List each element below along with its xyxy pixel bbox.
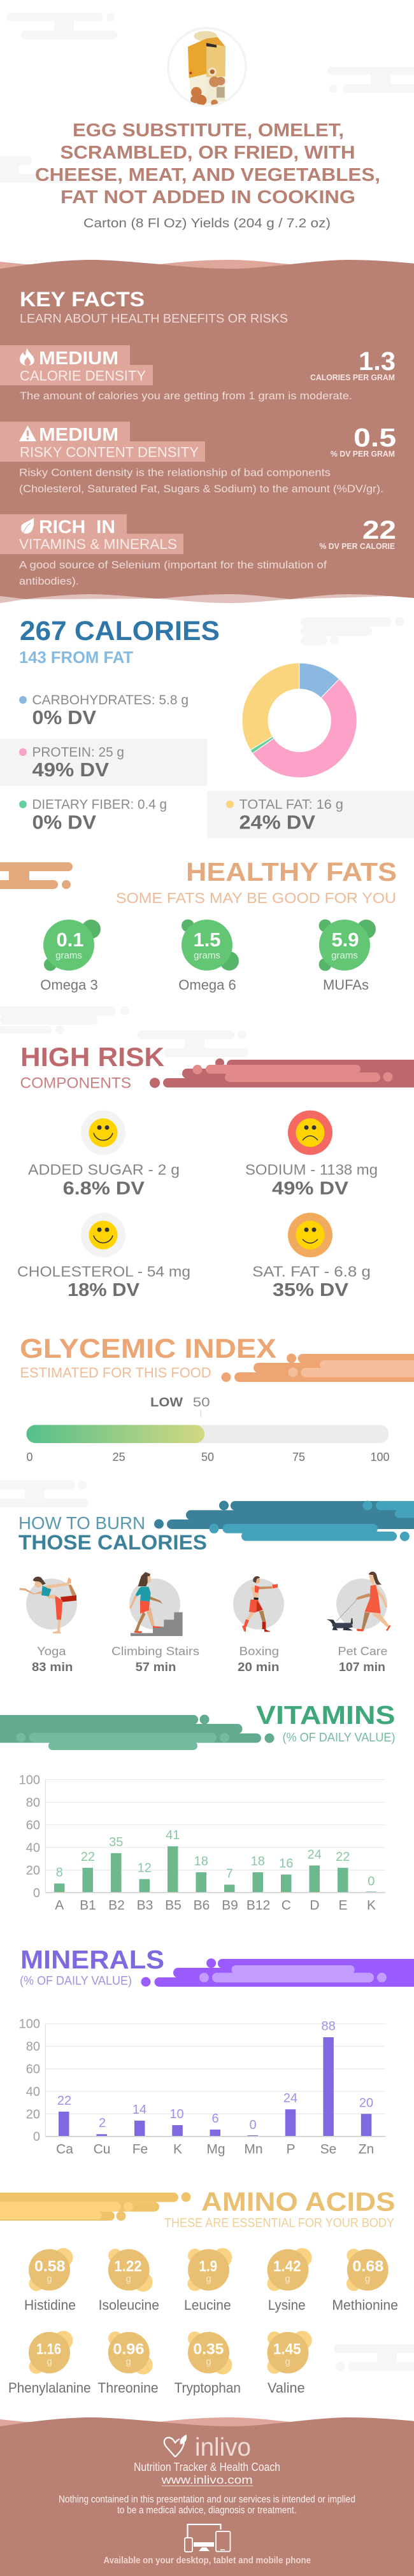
bar chart: minerals: 0 [249, 2118, 257, 2132]
amino: leucine: 1.9 [199, 2258, 217, 2275]
disclaimer: to be a medical advice, diagnosis or treatment. [117, 2505, 297, 2516]
stat: omega 6: grams [194, 950, 220, 961]
bar chart: vitamins: 41 [166, 1828, 180, 1842]
amino: methionine [332, 2249, 398, 2313]
amino: phenylalanine: g [46, 2356, 52, 2367]
amino: isoleucine: g [125, 2274, 131, 2284]
amino: tryptophan: Tryptophan [175, 2380, 241, 2396]
activity durations: 107 min [339, 1661, 385, 1674]
activity durations [32, 1661, 385, 1674]
amino: isoleucine [99, 2249, 159, 2313]
risk: sodium: 49% DV [272, 1178, 349, 1199]
bar chart: minerals: Ca [56, 2142, 73, 2157]
stat: omega 3: 0.1 [56, 929, 84, 951]
rating: RICH IN [39, 517, 115, 537]
amino: histidine: Histidine [24, 2297, 76, 2313]
activity durations: 20 min [238, 1661, 279, 1674]
amino: lysine [268, 2248, 312, 2313]
risk: saturated fat: SAT. FAT - 6.8 g [252, 1263, 371, 1279]
disclaimer: Nothing contained in this presentation and our services is intended or implied [59, 2494, 355, 2505]
decorative banner [0, 1714, 274, 1750]
amino: threonine: g [125, 2356, 131, 2367]
bar chart: minerals: 0 [33, 2130, 40, 2144]
amino: leucine [184, 2248, 232, 2313]
serving size: Carton (8 Fl Oz) Yields (204 g / 7.2 oz) [83, 217, 331, 231]
bar chart: vitamins: 7 [226, 1867, 233, 1881]
amino: threonine [97, 2331, 159, 2396]
icon: flame [20, 348, 34, 366]
logo: inlivo: inlivo [195, 2433, 251, 2461]
bar chart: vitamins: C [282, 1898, 291, 1913]
stat: omega 3: grams [55, 950, 82, 961]
macro: dietary fiber: DIETARY FIBER: 0.4 g [32, 797, 167, 812]
panel: how to burn those calories [18, 1500, 414, 1674]
decorative cloud: top right [327, 67, 414, 93]
logo: inlivo [164, 2433, 251, 2461]
bar chart: minerals: Mn [244, 2142, 263, 2157]
panel: amino acids [0, 2187, 398, 2396]
bar chart: minerals: Mg [206, 2142, 225, 2157]
bar chart: vitamins: B3 [137, 1898, 153, 1913]
title: SCRAMBLED, OR FRIED, WITH [60, 143, 355, 163]
description: antibodies). [19, 575, 79, 587]
heading: VITAMINS [256, 1700, 395, 1730]
panel: glycemic index [20, 1334, 414, 1463]
decorative banner [150, 1058, 414, 1088]
gauge scale: 25 [113, 1451, 125, 1463]
macro: total fat: TOTAL FAT: 16 g [239, 797, 343, 812]
bar chart: minerals: Zn [359, 2142, 374, 2157]
decorative cloud: lower left [0, 1006, 129, 1034]
macro: total fat: 24% DV [239, 811, 315, 833]
activity labels: Boxing [239, 1645, 279, 1658]
stat: omega 6: Omega 6 [178, 977, 236, 993]
bar chart: minerals: 10 [169, 2107, 184, 2121]
activity: climbing stairs [129, 1572, 183, 1636]
bar chart: vitamins: 0 [33, 1886, 40, 1900]
description: Risky Content density is the relationship of bad components [19, 466, 331, 479]
activity labels [37, 1645, 387, 1658]
bar chart: minerals: 20 [359, 2096, 373, 2110]
heading: AMINO ACIDS [201, 2187, 395, 2217]
bar chart: minerals: 6 [211, 2112, 219, 2126]
decorative banner [0, 2192, 191, 2221]
amino: histidine: 0.58 [34, 2258, 65, 2275]
description [19, 466, 383, 495]
bar chart: vitamins: 80 [26, 1796, 40, 1810]
amino: methionine: 0.68 [352, 2258, 383, 2275]
risk: cholesterol: 18% DV [68, 1280, 140, 1300]
row highlight: protein [0, 739, 207, 786]
activity labels: Yoga [37, 1645, 67, 1658]
amino: isoleucine: 1.22 [114, 2258, 142, 2275]
amino: valine: 1.45 [273, 2341, 301, 2358]
bar chart: minerals: Se [320, 2142, 336, 2157]
subheading: LEARN ABOUT HEALTH BENEFITS OR RISKS [20, 312, 288, 326]
risk: sodium: SODIUM - 1138 mg [245, 1162, 378, 1178]
macro: protein [19, 745, 124, 781]
subheading: from fat: 143 FROM FAT [19, 648, 133, 667]
label: CALORIE DENSITY [20, 368, 146, 384]
macro: carbohydrates [19, 693, 189, 729]
availability note: Available on your desktop, tablet and mobile phone [103, 2555, 311, 2566]
amino: isoleucine: Isoleucine [99, 2297, 159, 2313]
bar chart: minerals: Fe [132, 2142, 148, 2157]
heading: GLYCEMIC INDEX [20, 1334, 276, 1364]
stat: MUFAs: grams [331, 950, 358, 961]
value: 0.5 [353, 423, 396, 452]
heading: key facts: KEY FACTS [20, 288, 145, 311]
label: VITAMINS & MINERALS [19, 536, 177, 552]
activity labels: Pet Care [338, 1645, 387, 1658]
bar chart: vitamins: E [338, 1898, 348, 1913]
amino: methionine: g [365, 2274, 370, 2284]
amino: valine: Valine [268, 2380, 305, 2396]
panel: key facts [0, 260, 414, 603]
heading: calories: 267 CALORIES [20, 616, 220, 646]
title: CHEESE, MEAT, AND VEGETABLES, [35, 165, 380, 185]
bar chart: minerals: 88 [321, 2019, 336, 2033]
bar chart: vitamins: B5 [165, 1898, 182, 1913]
amino: phenylalanine: Phenylalanine [8, 2380, 91, 2396]
value: 22 [362, 515, 396, 544]
bar chart: vitamins: B9 [222, 1898, 238, 1913]
description: A good source of Selenium (important for the stimulation of [19, 559, 327, 571]
bar chart: vitamins: 40 [26, 1841, 40, 1855]
amino: lysine: g [285, 2274, 290, 2284]
macro: dietary fiber: 0% DV [32, 811, 96, 833]
bar chart: vitamins: 24 [308, 1847, 322, 1861]
decorative cloud: calories [301, 617, 404, 645]
panel: high risk components [17, 1042, 414, 1300]
decorative cloud: high risk [138, 1030, 248, 1057]
bar chart: minerals: 24 [283, 2091, 297, 2105]
activity: boxing [233, 1576, 284, 1632]
amino: tryptophan [175, 2331, 241, 2396]
description: (Cholesterol, Saturated Fat, Sugars & Sodium) to the amount (%DV/gr). [19, 483, 383, 495]
amino: phenylalanine: 1.16 [36, 2341, 61, 2358]
amino: methionine: Methionine [332, 2297, 398, 2313]
stat: omega 6 [178, 920, 239, 993]
bar chart: minerals: K [173, 2142, 182, 2157]
risk: sodium [245, 1111, 378, 1199]
decorative banner [222, 1354, 414, 1382]
description: The amount of calories you are getting from 1 gram is moderate. [20, 390, 352, 402]
unit: CALORIES PER GRAM [310, 373, 395, 382]
bar chart: vitamins: 35 [109, 1835, 123, 1849]
bar chart: minerals: P [286, 2142, 296, 2157]
panel: minerals [19, 1945, 414, 2157]
tagline: Nutrition Tracker & Health Coach [134, 2460, 280, 2473]
panel: vitamins [0, 1700, 395, 1913]
amino: lysine: 1.42 [273, 2258, 301, 2275]
bar chart: vitamins: K [367, 1898, 376, 1913]
macro: protein: PROTEIN: 25 g [32, 745, 124, 760]
icon: leaf [21, 518, 34, 534]
bar chart: vitamins [19, 1774, 385, 1913]
bar chart: vitamins: 12 [138, 1861, 152, 1875]
macro: carbohydrates: 0% DV [32, 706, 96, 729]
fact: rich in vitamins and minerals [0, 515, 396, 587]
disclaimer [59, 2494, 355, 2516]
gauge label: LOW [150, 1396, 183, 1410]
rating: MEDIUM [39, 425, 118, 445]
bar chart: minerals: 14 [132, 2103, 146, 2117]
amino: valine: g [285, 2356, 290, 2367]
stat: MUFAs [319, 920, 376, 993]
risk: saturated fat: 35% DV [273, 1280, 349, 1300]
decorative cloud: amino acids right [334, 2344, 414, 2371]
row highlight: total fat [207, 791, 414, 838]
bar chart: vitamins: 20 [26, 1863, 40, 1877]
macro: total fat [226, 797, 343, 833]
amino: tryptophan: 0.35 [193, 2341, 224, 2358]
decorative banner [141, 1958, 414, 1987]
amino: valine [268, 2331, 312, 2396]
bar chart: vitamins: B1 [80, 1898, 96, 1913]
decorative cloud: burn calories [0, 1480, 89, 1507]
bar chart: vitamins: 60 [26, 1819, 40, 1833]
bar chart: vitamins: D [310, 1898, 320, 1913]
stat: MUFAs: MUFAs [323, 977, 369, 993]
heading line 2: THOSE CALORIES [18, 1531, 207, 1554]
icon: devices [185, 2524, 231, 2552]
gauge scale: 75 [292, 1451, 305, 1463]
bar chart: vitamins: 100 [19, 1774, 40, 1788]
activity: pet care [327, 1572, 390, 1632]
heading: HIGH RISK [20, 1042, 164, 1072]
bar chart: vitamins: B2 [108, 1898, 125, 1913]
stat: omega 6: 1.5 [193, 929, 221, 951]
amino: tryptophan: g [206, 2356, 211, 2367]
subheading: (% OF DAILY VALUE) [20, 1975, 132, 1988]
rating: MEDIUM [39, 348, 118, 369]
gauge label [150, 1396, 210, 1417]
title: FAT NOT ADDED IN COOKING [61, 187, 355, 208]
risk: cholesterol [17, 1213, 190, 1300]
stat: omega 3 [40, 920, 101, 993]
bar chart: minerals: 22 [57, 2094, 71, 2108]
risk: added sugar [28, 1111, 180, 1199]
amino: lysine: Lysine [268, 2297, 306, 2313]
food image: egg carton in circle [168, 28, 246, 106]
bar chart: vitamins: B6 [194, 1898, 210, 1913]
decorative cloud: top left [6, 13, 117, 39]
subheading: SOME FATS MAY BE GOOD FOR YOU [116, 890, 396, 906]
subheading: ESTIMATED FOR THIS FOOD [20, 1365, 211, 1381]
website link: www.inlivo.com [161, 2473, 253, 2486]
subheading: THESE ARE ESSENTIAL FOR YOUR BODY [164, 2216, 394, 2230]
risk: saturated fat [252, 1213, 371, 1300]
amino: threonine: 0.96 [113, 2341, 144, 2358]
amino: phenylalanine [8, 2331, 91, 2396]
panel: healthy fats [0, 857, 397, 993]
gauge scale: 50 [201, 1451, 214, 1463]
bar chart: minerals: 40 [26, 2085, 40, 2099]
bar chart: vitamins: 16 [279, 1857, 293, 1871]
icon: warning triangle [19, 425, 36, 441]
panel: footer [0, 2417, 414, 2576]
macro: dietary fiber [19, 797, 167, 833]
decorative cloud: left behind title [0, 156, 85, 183]
bar chart: minerals: Cu [94, 2142, 110, 2157]
amino: leucine: Leucine [184, 2297, 231, 2313]
bar chart: minerals: 100 [19, 2017, 40, 2032]
gauge bar [27, 1425, 389, 1443]
bar chart: vitamins: 8 [56, 1866, 63, 1880]
amino: histidine [24, 2248, 76, 2313]
decorative banner [154, 1500, 414, 1541]
gauge label: 50 [193, 1396, 210, 1410]
activity labels: Climbing Stairs [111, 1645, 199, 1658]
bar chart: vitamins: 0 [368, 1875, 375, 1889]
stat: MUFAs: 5.9 [331, 929, 359, 951]
unit: % DV PER GRAM [331, 449, 395, 459]
bar chart: vitamins: B12 [246, 1898, 270, 1913]
gauge scale: 0 [27, 1451, 33, 1463]
bar chart: vitamins: 22 [81, 1850, 95, 1864]
risk: added sugar: ADDED SUGAR - 2 g [28, 1162, 180, 1178]
heading: HEALTHY FATS [186, 857, 397, 886]
bar chart: vitamins: 22 [336, 1850, 350, 1864]
title [35, 120, 380, 208]
stat: omega 3: Omega 3 [40, 977, 98, 993]
bar chart: vitamins: 18 [194, 1854, 208, 1868]
heading line 1: HOW TO BURN [18, 1513, 145, 1533]
bar chart: minerals: 60 [26, 2063, 40, 2077]
gauge scale [27, 1451, 390, 1463]
bar chart: vitamins: 18 [251, 1854, 265, 1868]
subheading: COMPONENTS [20, 1075, 131, 1092]
bar chart: minerals: 2 [99, 2116, 106, 2130]
unit: % DV PER CALORIE [320, 541, 395, 551]
value: 1.3 [359, 346, 396, 376]
activity durations: 83 min [32, 1661, 73, 1674]
title: EGG SUBSTITUTE, OMELET, [73, 120, 344, 141]
amino: threonine: Threonine [97, 2380, 159, 2396]
macro: carbohydrates: CARBOHYDRATES: 5.8 g [32, 693, 189, 708]
bar chart: minerals: 80 [26, 2040, 40, 2054]
decorative banner [0, 862, 73, 889]
bar chart: minerals: 20 [26, 2107, 40, 2121]
panel: calories [0, 616, 414, 838]
subheading: (% OF DAILY VALUE) [283, 1731, 395, 1744]
gauge scale: 100 [371, 1451, 390, 1463]
heading: MINERALS [20, 1945, 164, 1974]
risk: added sugar: 6.8% DV [63, 1178, 145, 1199]
amino: histidine: g [46, 2274, 52, 2284]
fact: calorie density [0, 345, 396, 402]
activity: yoga [20, 1577, 77, 1633]
bar chart: vitamins: A [55, 1898, 64, 1913]
description [19, 559, 327, 587]
label: RISKY CONTENT DENSITY [20, 445, 199, 460]
fact: risky content density [0, 422, 396, 495]
amino: leucine: g [206, 2274, 211, 2284]
macro: protein: 49% DV [32, 758, 109, 781]
activity durations: 57 min [136, 1661, 176, 1674]
donut chart [242, 663, 357, 778]
bar chart: minerals [19, 2017, 385, 2157]
risk: cholesterol: CHOLESTEROL - 54 mg [17, 1263, 190, 1279]
